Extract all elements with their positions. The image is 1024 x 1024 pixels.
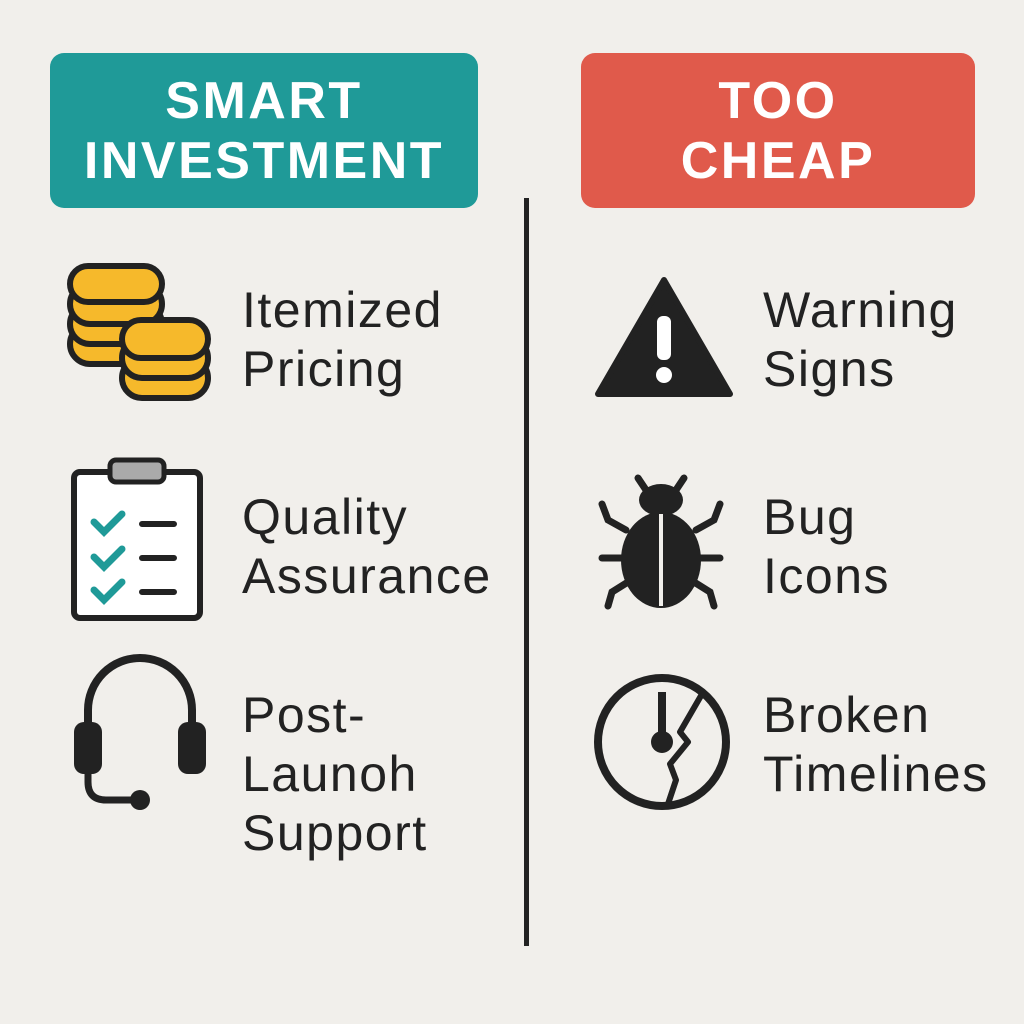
text: itemized pricing <box>242 282 443 397</box>
icon: warning <box>595 277 733 397</box>
icon: coins <box>67 263 211 401</box>
text: itemized pricing: Itemized <box>242 282 443 338</box>
header: too cheap <box>581 53 975 208</box>
text: post-launch support: Support <box>242 805 428 861</box>
text: warning signs: Signs <box>763 341 896 397</box>
text: broken timelines: Broken <box>763 687 930 743</box>
header: smart investment <box>50 53 478 208</box>
divider <box>524 198 529 946</box>
text: broken timelines: Timelines <box>763 746 989 802</box>
text: quality assurance: Assurance <box>242 548 492 604</box>
header: too cheap: CHEAP <box>681 132 875 190</box>
icon: bug <box>598 474 724 610</box>
icon: broken clock <box>594 674 730 810</box>
text: quality assurance: Quality <box>242 489 408 545</box>
text: post-launch support: Post- <box>242 687 366 743</box>
text: post-launch support <box>242 687 428 861</box>
header: too cheap: TOO <box>718 72 838 130</box>
header: smart investment: INVESTMENT <box>84 132 444 190</box>
header: smart investment: SMART <box>165 72 363 130</box>
text: warning signs <box>763 282 958 397</box>
text: bug icons <box>763 489 890 604</box>
text: warning signs: Warning <box>763 282 958 338</box>
text: bug icons: Icons <box>763 548 890 604</box>
icon: headset <box>74 654 206 810</box>
text: itemized pricing: Pricing <box>242 341 405 397</box>
text: broken timelines <box>763 687 989 802</box>
text: bug icons: Bug <box>763 489 856 545</box>
icon: clipboard <box>71 458 203 621</box>
text: post-launch support: Launoh <box>242 746 418 802</box>
text: quality assurance <box>242 489 492 604</box>
